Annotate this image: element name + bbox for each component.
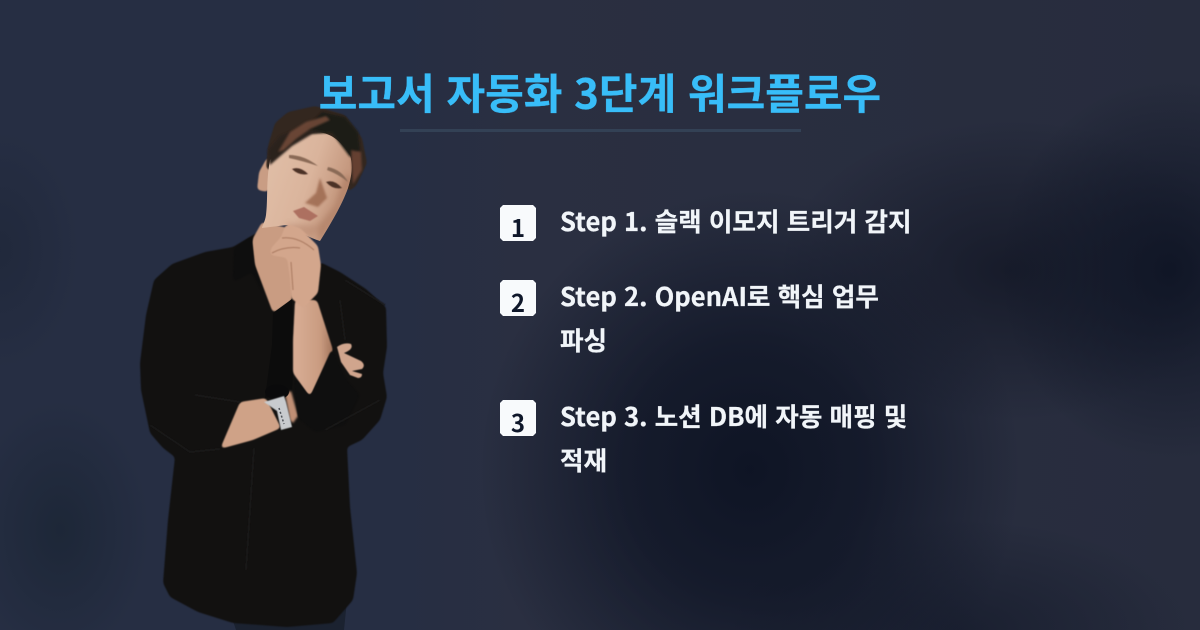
watch face [265,384,289,400]
rolled sleeve right [293,348,360,432]
crown dark [300,112,360,157]
badge 3: 3 [511,404,525,439]
inner shirt shadow [265,299,294,398]
title: 보고서 자동화 3단계 워크플로우 [319,61,881,122]
hand at chin [270,224,321,308]
step 3 text [560,397,907,478]
badge 1: 1 [511,209,525,244]
right cheek shade [317,176,350,239]
hair front edge [268,128,326,165]
hand wrist piece [285,391,298,423]
shirt [140,232,387,627]
lower forearm [220,398,281,449]
jeans [232,600,347,630]
watch band [264,396,292,430]
step 2 text: Step 2. OpenAI로 핵심 업무 [560,277,879,314]
hair [266,106,367,192]
right eye [326,181,342,188]
badge 3 [500,400,536,436]
step 2 text [560,277,879,358]
badge 2: 2 [511,284,525,319]
ear [257,156,274,192]
nose shadow [305,178,327,207]
step 3 text: Step 3. 노션 DB에 자동 매핑 및 [560,397,907,434]
neck and chest [252,222,305,313]
badge 2 [500,280,536,316]
finger shadows [272,238,314,290]
person portrait [140,106,388,630]
hair highlight [278,116,330,152]
left eye [292,168,308,174]
step 2 text: 파싱 [560,321,607,358]
left eyebrow [289,155,318,166]
step 1 text: Step 1. 슬랙 이모지 트리거 감지 [560,202,912,239]
collar [233,232,272,313]
under-lip shade [290,223,315,236]
watch band marks [279,408,284,424]
forearm raised [293,300,333,397]
step 3 text: 적재 [560,441,607,478]
badge 1 [500,205,536,241]
right eyebrow [327,167,348,182]
title underline [400,129,801,132]
hair highlight right [351,150,362,184]
mouth [293,207,318,221]
fingers right [337,343,364,378]
shirt folds [150,280,385,570]
face [262,132,352,241]
